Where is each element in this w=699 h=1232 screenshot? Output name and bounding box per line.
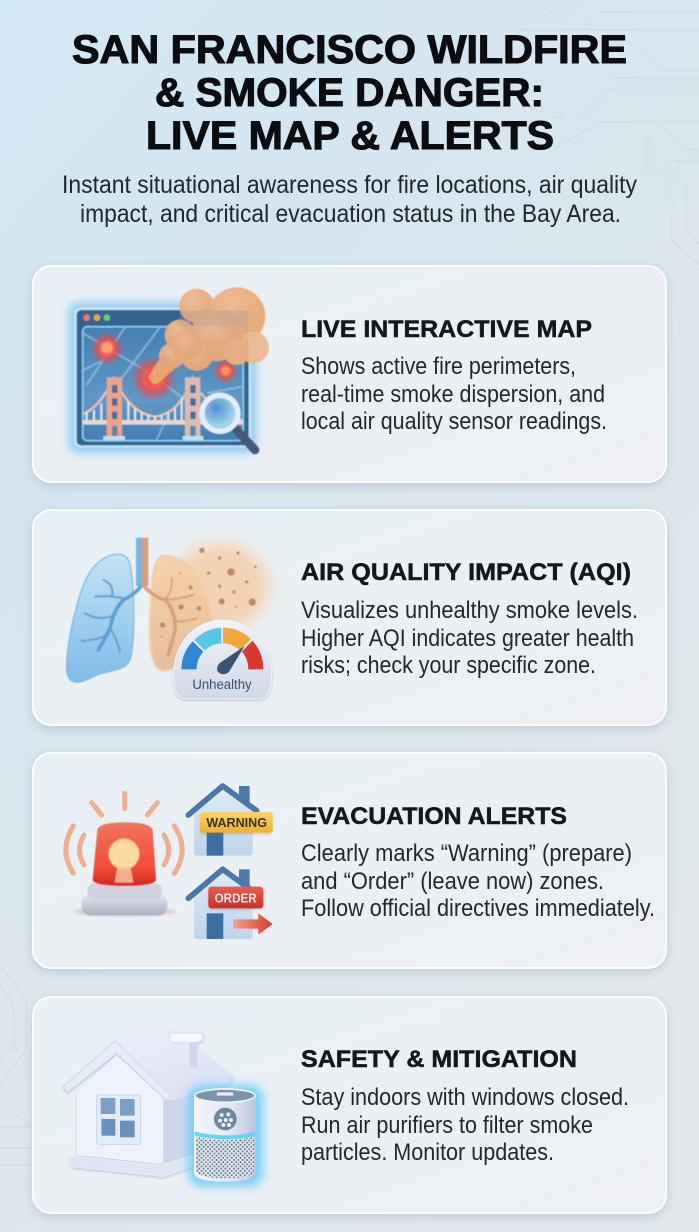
card text: risks; check your specific zone. [301,652,596,679]
card heading: SAFETY & MITIGATION [301,1046,577,1073]
card text: Visualizes unhealthy smoke levels. [301,597,638,624]
icon: air purifier [188,1085,263,1187]
panel: air quality impact [33,510,666,725]
card text [301,597,638,679]
icon: lungs and AQI gauge: Unhealthy [192,677,252,692]
card heading: LIVE INTERACTIVE MAP [301,316,592,343]
icon: warning house: WARNING [206,816,267,830]
subtitle: Instant situational awareness for fire locations, air quality [62,171,637,199]
card heading: AIR QUALITY IMPACT (AQI) [301,559,631,586]
card text: local air quality sensor readings. [301,408,607,435]
subtitle: impact, and critical evacuation status in the Bay Area. [80,200,621,228]
card text: and “Order” (leave now) zones. [301,868,604,895]
card text: particles. Monitor updates. [301,1139,554,1166]
smoke [148,287,269,384]
icon: map window with smoke [69,287,269,453]
subtitle [62,171,637,228]
icon: white house [63,1029,234,1177]
card text: Stay indoors with windows closed. [301,1084,629,1111]
card text [301,1084,629,1166]
title: LIVE MAP & ALERTS [146,114,554,158]
card text: Shows active fire perimeters, [301,353,576,380]
magnifier [237,430,255,450]
card text: Run air purifiers to filter smoke [301,1112,593,1139]
card text: real-time smoke dispersion, and [301,381,605,408]
panel: evacuation alerts [33,753,666,968]
card text: Follow official directives immediately. [301,895,655,922]
bridge [83,377,243,440]
icon: order house with arrow: ORDER [215,891,257,905]
gauge [173,620,272,699]
card text: Clearly marks “Warning” (prepare) [301,840,632,867]
card heading: EVACUATION ALERTS [301,803,567,830]
title: & SMOKE DANGER: [155,71,544,115]
card text [301,840,655,922]
title: SAN FRANCISCO WILDFIRE [72,28,627,72]
icon: warning house [188,786,273,856]
title [72,28,627,158]
icon: order house with arrow [188,869,273,939]
panel: safety and mitigation [33,997,666,1213]
card text: Higher AQI indicates greater health [301,625,634,652]
card text [301,353,607,435]
icon: siren [66,793,182,916]
panel: live interactive map [33,266,666,482]
icon: lungs and AQI gauge [67,538,272,699]
